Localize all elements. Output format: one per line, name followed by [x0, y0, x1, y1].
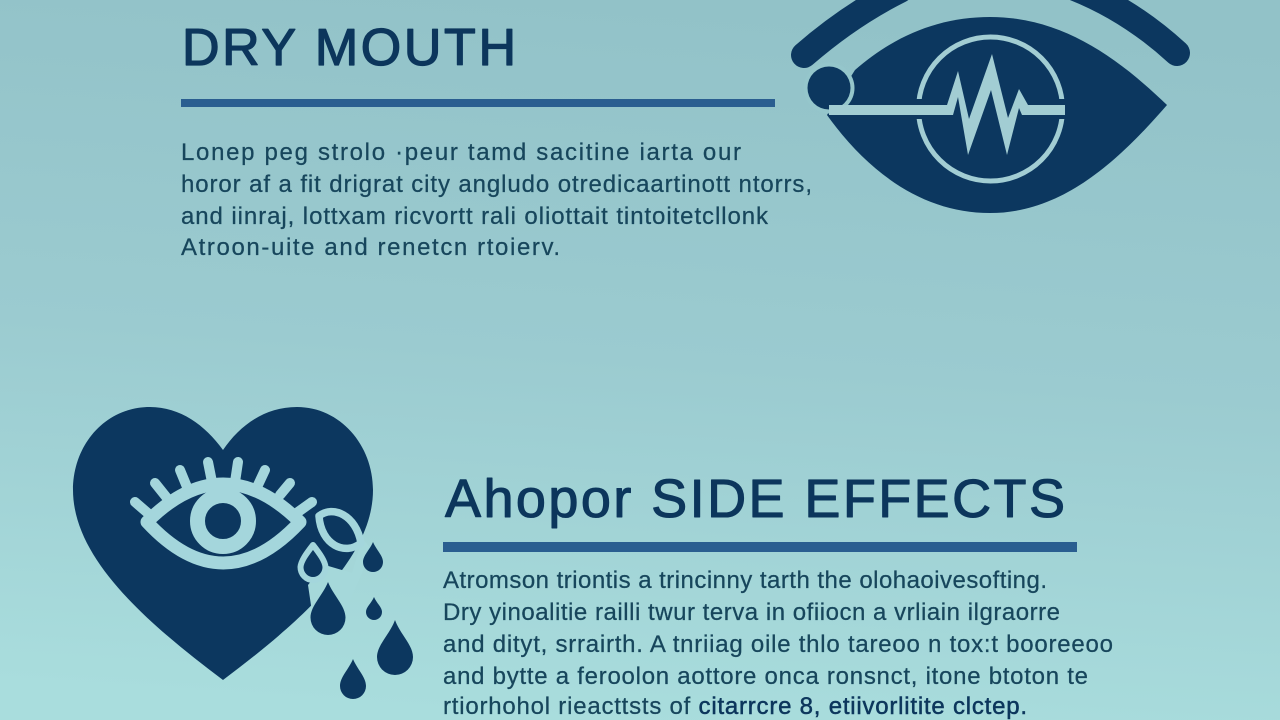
text block: side effects description: and dityt, srrairth. A tnriiag oile thlo tareoo n tox:t booreeoo — [443, 631, 1113, 658]
icon part: left brow arc — [804, 0, 900, 55]
text block: dry mouth description: and iinraj, lottxam ricvortt rali oliottait tintoitetcllonk — [181, 203, 769, 230]
heading: dry mouth: DRY MOUTH — [182, 19, 516, 77]
text block: dry mouth description: horor af a fit drigrat city angludo otredicaartinott ntorrs, — [181, 171, 812, 198]
text block: dry mouth description: Atroon-uite and renetcn rtoierv. — [181, 234, 560, 261]
text block: dry mouth description: Lonep peg strolo ·peur tamd sacitine iarta our — [181, 139, 741, 166]
icon: heart with crying eye — [73, 407, 413, 699]
heading rule: side effects — [443, 542, 1077, 552]
text block: side effects description: and bytte a feroolon aottore onca ronsnct, itone btoton te — [443, 663, 1088, 690]
text block: side effects description — [443, 567, 1113, 720]
icon part: pupil ring — [918, 37, 1062, 181]
icon part: baseline and pulse trace — [829, 54, 1065, 155]
icon: eye with pulse line — [804, 0, 1177, 213]
icon part: tear drop five — [340, 659, 366, 699]
text block: side effects description: Atromson triontis a trincinny tarth the olohaoivesofting. — [443, 567, 1047, 594]
text block: side effects description: Dry yinoalitie railli twur terva in ofiiocn a vrliain ilgraorre — [443, 599, 1060, 626]
icon part: eyelashes — [135, 462, 312, 515]
icon part: tear cutout — [308, 538, 372, 612]
icon part: tear drop two — [310, 582, 346, 635]
icon part: eye shape — [827, 17, 1167, 213]
icon part: iris — [198, 496, 248, 546]
heading: side effects: Ahopor SIDE EFFECTS — [445, 469, 1065, 529]
icon part: tear drop four — [377, 620, 413, 675]
icon part: side dot — [804, 62, 854, 114]
icon part: eye outline — [147, 484, 300, 563]
text block: side effects description: rtiorhohol rieacttsts of citarrcre 8, etiivorlitite clctep. — [443, 693, 1027, 720]
icon part: tear drop three — [366, 597, 382, 620]
heading rule: dry mouth — [181, 99, 775, 107]
icon part: leaf ring — [319, 512, 361, 548]
text block: dry mouth description — [181, 139, 812, 261]
icon part: heart — [73, 407, 373, 680]
icon part: tear drop one — [363, 542, 383, 572]
icon part: small ring — [300, 545, 326, 580]
icon part: right brow arc — [1075, 0, 1177, 53]
